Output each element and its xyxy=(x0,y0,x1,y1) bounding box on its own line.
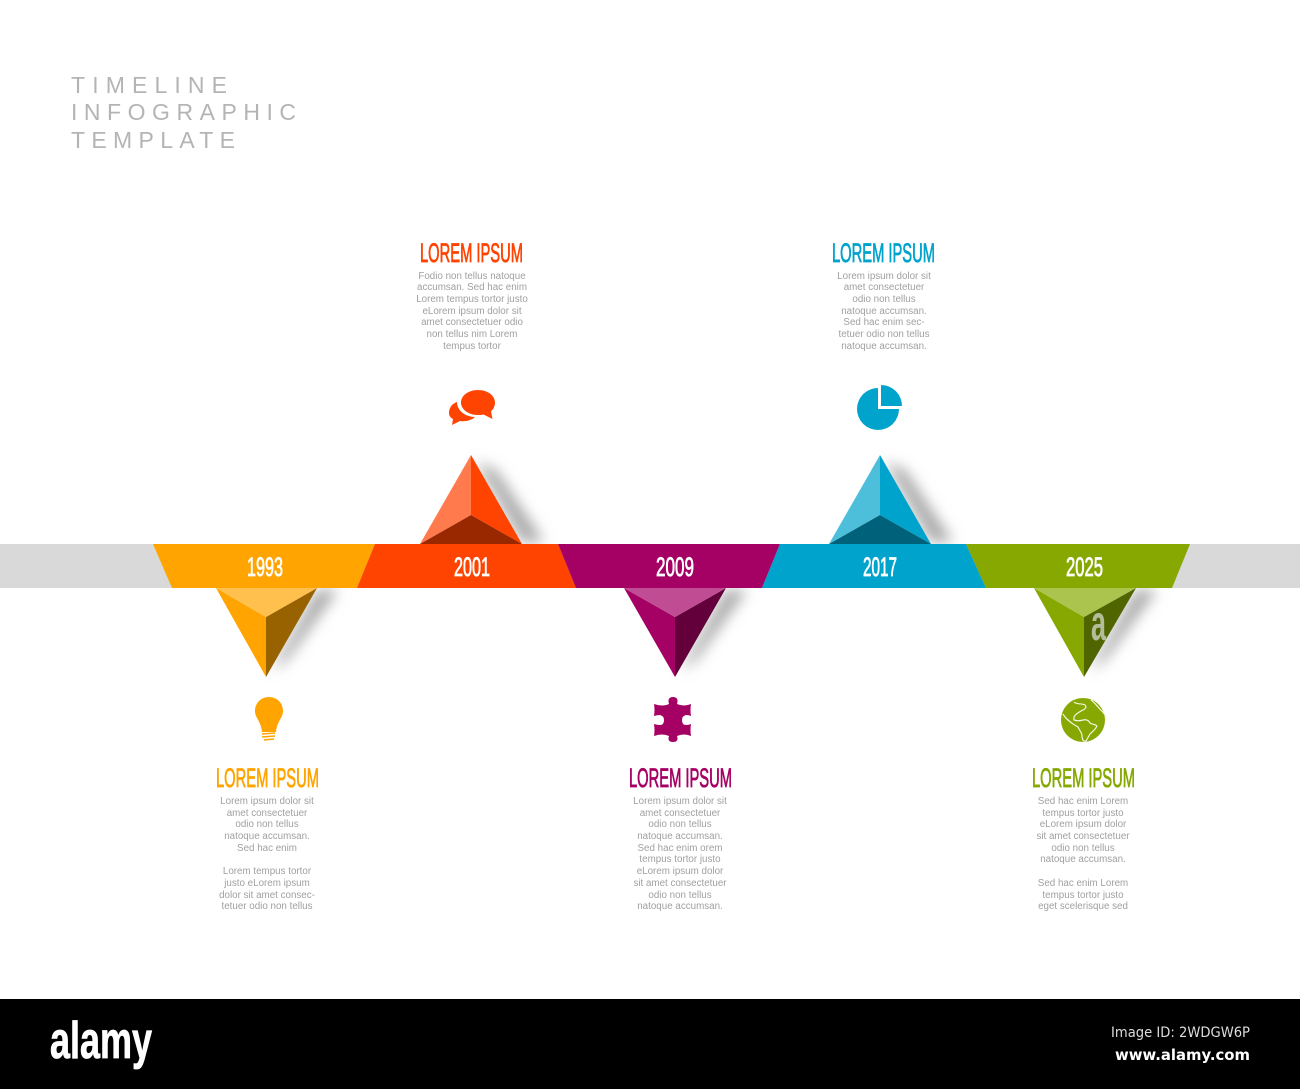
segment: 2009: 2009 xyxy=(656,552,694,582)
website: www.alamy.com xyxy=(1115,1046,1250,1064)
body: 1993: odio non tellus xyxy=(235,819,299,830)
pyramid: green: a xyxy=(1091,595,1107,651)
segment: 2017 xyxy=(762,544,986,588)
pyramid: purple xyxy=(624,588,747,677)
body: 2025: natoque accumsan. xyxy=(1040,854,1126,865)
heading: 2009: LOREM IPSUM xyxy=(629,763,732,793)
text block: 2017 xyxy=(832,238,935,352)
body: 1993: Lorem tempus tortor xyxy=(223,866,312,877)
icon: globe xyxy=(1061,698,1106,742)
pyramid: red xyxy=(420,455,544,544)
body: 2017: amet consectetuer xyxy=(844,282,925,293)
heading: 2001: LOREM IPSUM xyxy=(420,238,523,268)
body: 2025: Sed hac enim Lorem xyxy=(1038,796,1128,807)
title: TIMELINE xyxy=(71,72,227,98)
body: 2009: natoque accumsan. xyxy=(637,901,723,912)
body: 2001: eLorem ipsum dolor sit xyxy=(422,306,522,317)
pyramid: orange xyxy=(216,588,338,677)
body: 1993: dolor sit amet consec- xyxy=(219,890,315,901)
segment: 2025 xyxy=(966,544,1190,588)
pyramid: blue xyxy=(829,455,953,544)
image id: Image ID: 2WDGW6P xyxy=(1111,1025,1250,1041)
body: 2009: amet consectetuer xyxy=(640,808,721,819)
text block: 1993 xyxy=(216,763,319,912)
segment: 2017: 2017 xyxy=(863,552,897,582)
body: 2009: odio non tellus xyxy=(648,890,712,901)
pyramid: green xyxy=(1034,588,1157,677)
body: 2017: Sed hac enim sec- xyxy=(843,317,925,328)
body: 2009: Sed hac enim orem xyxy=(638,843,722,854)
body: 1993: Sed hac enim xyxy=(237,843,297,854)
heading: 2025: LOREM IPSUM xyxy=(1032,763,1135,793)
heading: 1993: LOREM IPSUM xyxy=(216,763,319,793)
heading: 2017: LOREM IPSUM xyxy=(832,238,935,268)
body: 2001: amet consectetuer odio xyxy=(421,317,523,328)
body: 2025 xyxy=(1036,796,1130,912)
icon: puzzle piece xyxy=(654,697,691,742)
body: 2009: natoque accumsan. xyxy=(637,831,723,842)
body: 2009: tempus tortor justo xyxy=(639,854,721,865)
title: INFOGRAPHIC xyxy=(71,99,296,125)
body: 2025: tempus tortor justo xyxy=(1042,808,1124,819)
footer: watermark band xyxy=(0,999,1300,1089)
body: 2001 xyxy=(416,271,528,352)
body: 2025: odio non tellus xyxy=(1051,843,1115,854)
segment: 1993: 1993 xyxy=(247,552,283,582)
body: 2009: odio non tellus xyxy=(648,819,712,830)
body: 1993: amet consectetuer xyxy=(227,808,308,819)
body: 2017: tetuer odio non tellus xyxy=(839,329,930,340)
segment: 2001: 2001 xyxy=(454,552,490,582)
body: 2017 xyxy=(837,271,931,352)
logo: alamy: alamy xyxy=(50,1012,152,1070)
body: 2001: Fodio non tellus natoque xyxy=(418,271,526,282)
segment: 2009 xyxy=(558,544,780,588)
body: 2017: Lorem ipsum dolor sit xyxy=(837,271,931,282)
segment: 2025: 2025 xyxy=(1066,552,1103,582)
text block: 2025 xyxy=(1032,763,1135,912)
icon: light bulb xyxy=(255,697,283,740)
body: 2009: sit amet consectetuer xyxy=(633,878,727,889)
body: 2001: Lorem tempus tortor justo xyxy=(416,294,528,305)
body: 1993: natoque accumsan. xyxy=(224,831,310,842)
body: 1993: Lorem ipsum dolor sit xyxy=(220,796,314,807)
icon: speech bubbles xyxy=(449,390,495,425)
text block: 2009 xyxy=(629,763,732,912)
body: 2025: eget scelerisque sed xyxy=(1038,901,1128,912)
body: 2017: natoque accumsan. xyxy=(841,306,927,317)
body: 2001: non tellus nim Lorem xyxy=(427,329,517,340)
body: 2001: accumsan. Sed hac enim xyxy=(417,282,527,293)
title xyxy=(71,72,296,153)
segment: 2001 xyxy=(357,544,576,588)
body: 1993: justo eLorem ipsum xyxy=(223,878,310,889)
body: 2017: natoque accumsan. xyxy=(841,341,927,352)
body: 2009: Lorem ipsum dolor sit xyxy=(633,796,727,807)
body: 1993: tetuer odio non tellus xyxy=(222,901,313,912)
body: 2017: odio non tellus xyxy=(852,294,916,305)
body: 2001: tempus tortor xyxy=(443,341,502,352)
title: TEMPLATE xyxy=(71,127,235,153)
body: 2025: eLorem ipsum dolor xyxy=(1040,819,1127,830)
body: 2025: sit amet consectetuer xyxy=(1036,831,1130,842)
body: 2009 xyxy=(633,796,727,912)
body: 1993 xyxy=(219,796,315,912)
body: 2025: Sed hac enim Lorem xyxy=(1038,878,1128,889)
body: 2009: eLorem ipsum dolor xyxy=(637,866,724,877)
icon: pie chart xyxy=(857,385,902,430)
text block: 2001 xyxy=(416,238,528,352)
body: 2025: tempus tortor justo xyxy=(1042,890,1124,901)
segment: 1993 xyxy=(153,544,375,588)
grey timeline bar xyxy=(0,544,1300,588)
